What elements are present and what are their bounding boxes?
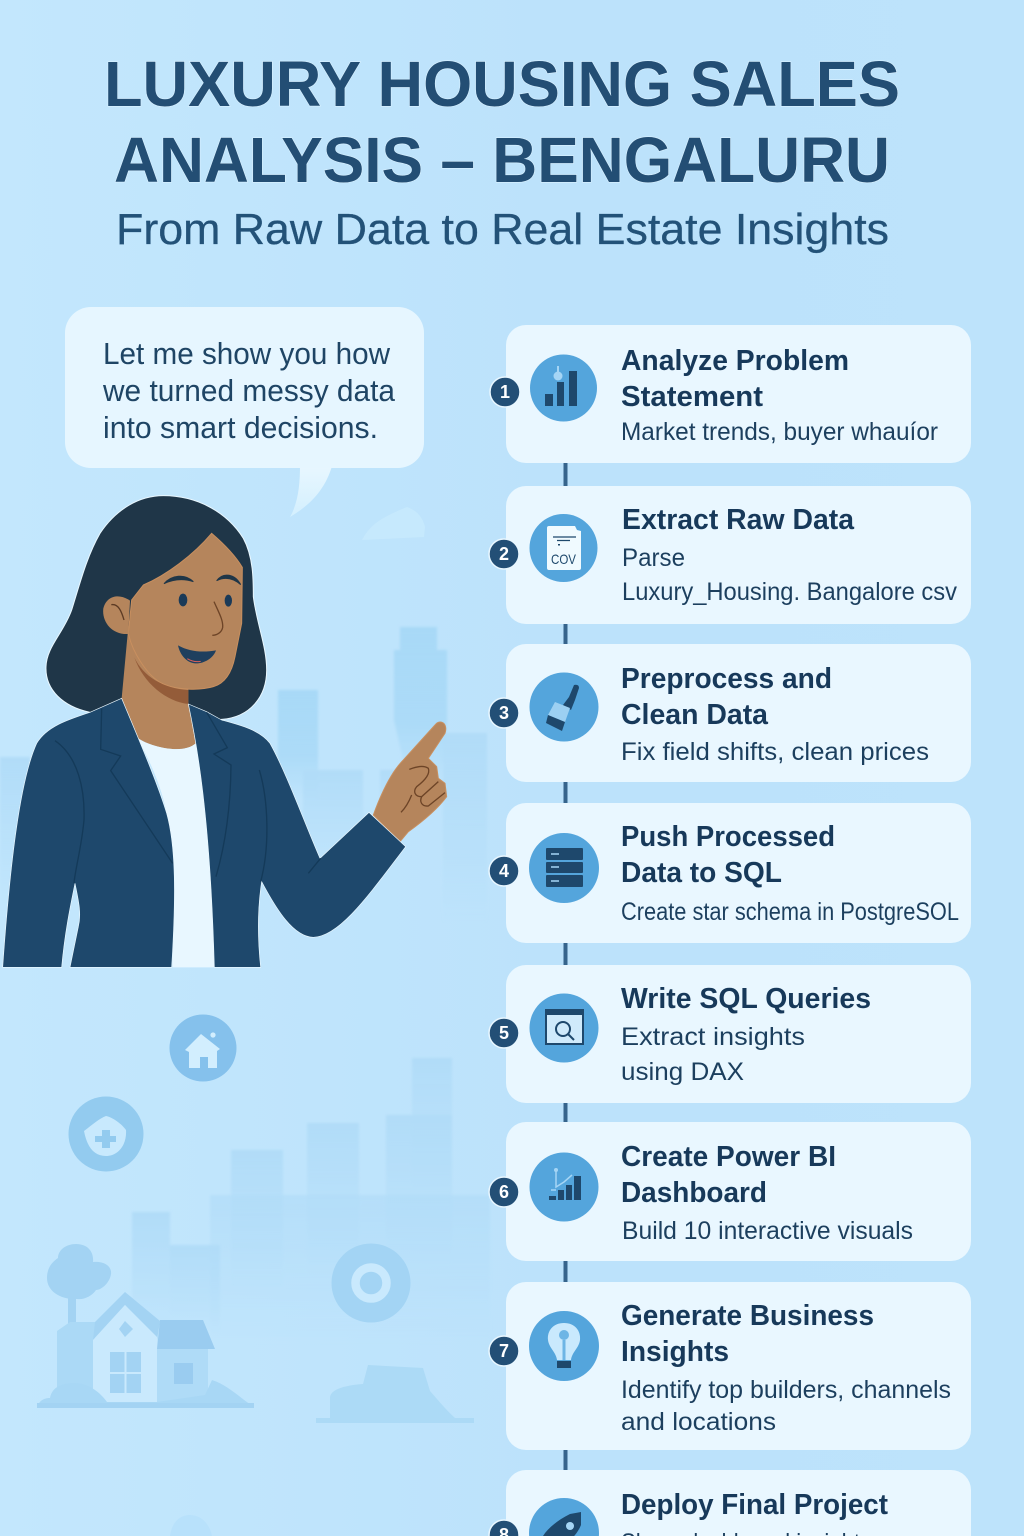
step 7: Insights <box>621 1336 729 1368</box>
number badge 2 <box>489 539 519 569</box>
tree <box>47 1244 111 1299</box>
speech bubble: into smart decisions. <box>103 410 378 445</box>
icon: shield cross circle <box>68 1096 144 1172</box>
number badge 8 <box>489 1520 519 1536</box>
title: ANALYSIS – BENGALURU <box>114 124 890 196</box>
number badge 3: 3 <box>499 703 509 723</box>
step 8: Deploy Final Project <box>621 1489 888 1521</box>
icon: bar chart <box>530 354 597 422</box>
step 3: Clean Data <box>621 699 769 731</box>
background skyline upper <box>0 627 487 923</box>
icon: target circle <box>332 1244 410 1322</box>
icon: home circle <box>170 1014 236 1082</box>
speech bubble: we turned messy data <box>102 373 396 408</box>
step 2: Extract Raw Data <box>622 504 855 536</box>
step 8 <box>489 1470 971 1536</box>
ear <box>103 596 130 634</box>
step 6: Dashboard <box>621 1177 767 1209</box>
step 3: Preprocess and <box>621 663 832 695</box>
hair <box>46 496 267 723</box>
icon: csv file: COV <box>551 551 577 567</box>
background skyline lower <box>132 1058 490 1345</box>
icon: light bulb <box>529 1311 599 1381</box>
number badge 6: 6 <box>499 1182 509 1202</box>
left wall and chimney <box>57 1322 95 1398</box>
step 1: Statement <box>621 381 763 413</box>
jacket left <box>3 698 174 967</box>
shrubs and ground <box>37 1380 254 1407</box>
icon: csv file <box>530 514 598 582</box>
step 1 <box>490 325 971 463</box>
step 1: Analyze Problem <box>621 345 849 377</box>
step 7: Generate Business <box>621 1300 874 1332</box>
number badge 1: 1 <box>500 382 510 402</box>
number badge 3 <box>489 698 519 728</box>
background cloud <box>362 507 425 540</box>
number badge 4 <box>489 856 519 886</box>
step 4 <box>489 803 971 943</box>
number badge 1 <box>490 377 520 407</box>
step 7: and locations <box>621 1408 776 1436</box>
neck shadow <box>134 657 188 704</box>
eyebrows <box>164 576 193 584</box>
shirt <box>138 738 214 967</box>
number badge 6 <box>489 1177 519 1207</box>
number badge 5: 5 <box>499 1023 509 1043</box>
number badge 4: 4 <box>499 861 509 881</box>
icon: brush <box>530 672 598 742</box>
step 7 <box>489 1282 971 1450</box>
step 4: Data to SQL <box>621 857 782 889</box>
subtitle: From Raw Data to Real Estate Insights <box>116 205 889 254</box>
speech bubble <box>65 307 424 517</box>
jacket lapels and seams <box>55 708 321 883</box>
step 6 <box>489 1122 971 1261</box>
window <box>110 1352 141 1393</box>
number badge 5 <box>489 1018 519 1048</box>
step 6: Build 10 interactive visuals <box>622 1217 913 1245</box>
eyes <box>179 594 187 606</box>
main wall <box>93 1305 157 1402</box>
icon: query window <box>530 994 598 1062</box>
illustration: bush <box>316 1365 474 1423</box>
mouth <box>178 645 216 663</box>
icon: dashboard chart <box>530 1152 598 1222</box>
number badge 7: 7 <box>499 1341 509 1361</box>
gable roof <box>93 1292 160 1340</box>
step 2 <box>489 486 971 624</box>
step 3 <box>489 644 971 782</box>
step 6: Create Power BI <box>621 1141 836 1173</box>
speech bubble: Let me show you how <box>103 336 391 371</box>
step 2: Luxury_Housing. Bangalore csv <box>622 578 957 606</box>
neck <box>122 627 196 749</box>
step 4: Push Processed <box>621 821 835 853</box>
step 5: Write SQL Queries <box>621 983 871 1015</box>
step 1: Market trends, buyer whauíor <box>621 418 938 446</box>
step 3: Fix field shifts, clean prices <box>621 738 929 766</box>
jacket right and sleeve <box>188 704 406 967</box>
illustration: house and tree <box>37 1244 254 1408</box>
icon: database server <box>529 833 599 903</box>
step 5: Extract insights <box>621 1023 805 1051</box>
title <box>104 48 900 196</box>
step 4: Create star schema in PostgreSOL <box>621 898 959 926</box>
number badge 2: 2 <box>499 544 509 564</box>
step 7: Identify top builders, channels <box>621 1376 951 1404</box>
presenter character <box>3 496 447 967</box>
right roof and wall <box>157 1320 215 1349</box>
number badge 7 <box>489 1336 519 1366</box>
face <box>128 533 242 689</box>
nose <box>212 602 223 635</box>
step connectors <box>564 463 568 1470</box>
hand <box>373 722 447 842</box>
title: LUXURY HOUSING SALES <box>104 48 900 120</box>
step 5 <box>489 965 971 1103</box>
step 2: Parse <box>622 544 685 572</box>
icon: rocket <box>529 1498 599 1536</box>
faint bottom shape <box>170 1515 212 1536</box>
step 5: using DAX <box>621 1058 744 1086</box>
